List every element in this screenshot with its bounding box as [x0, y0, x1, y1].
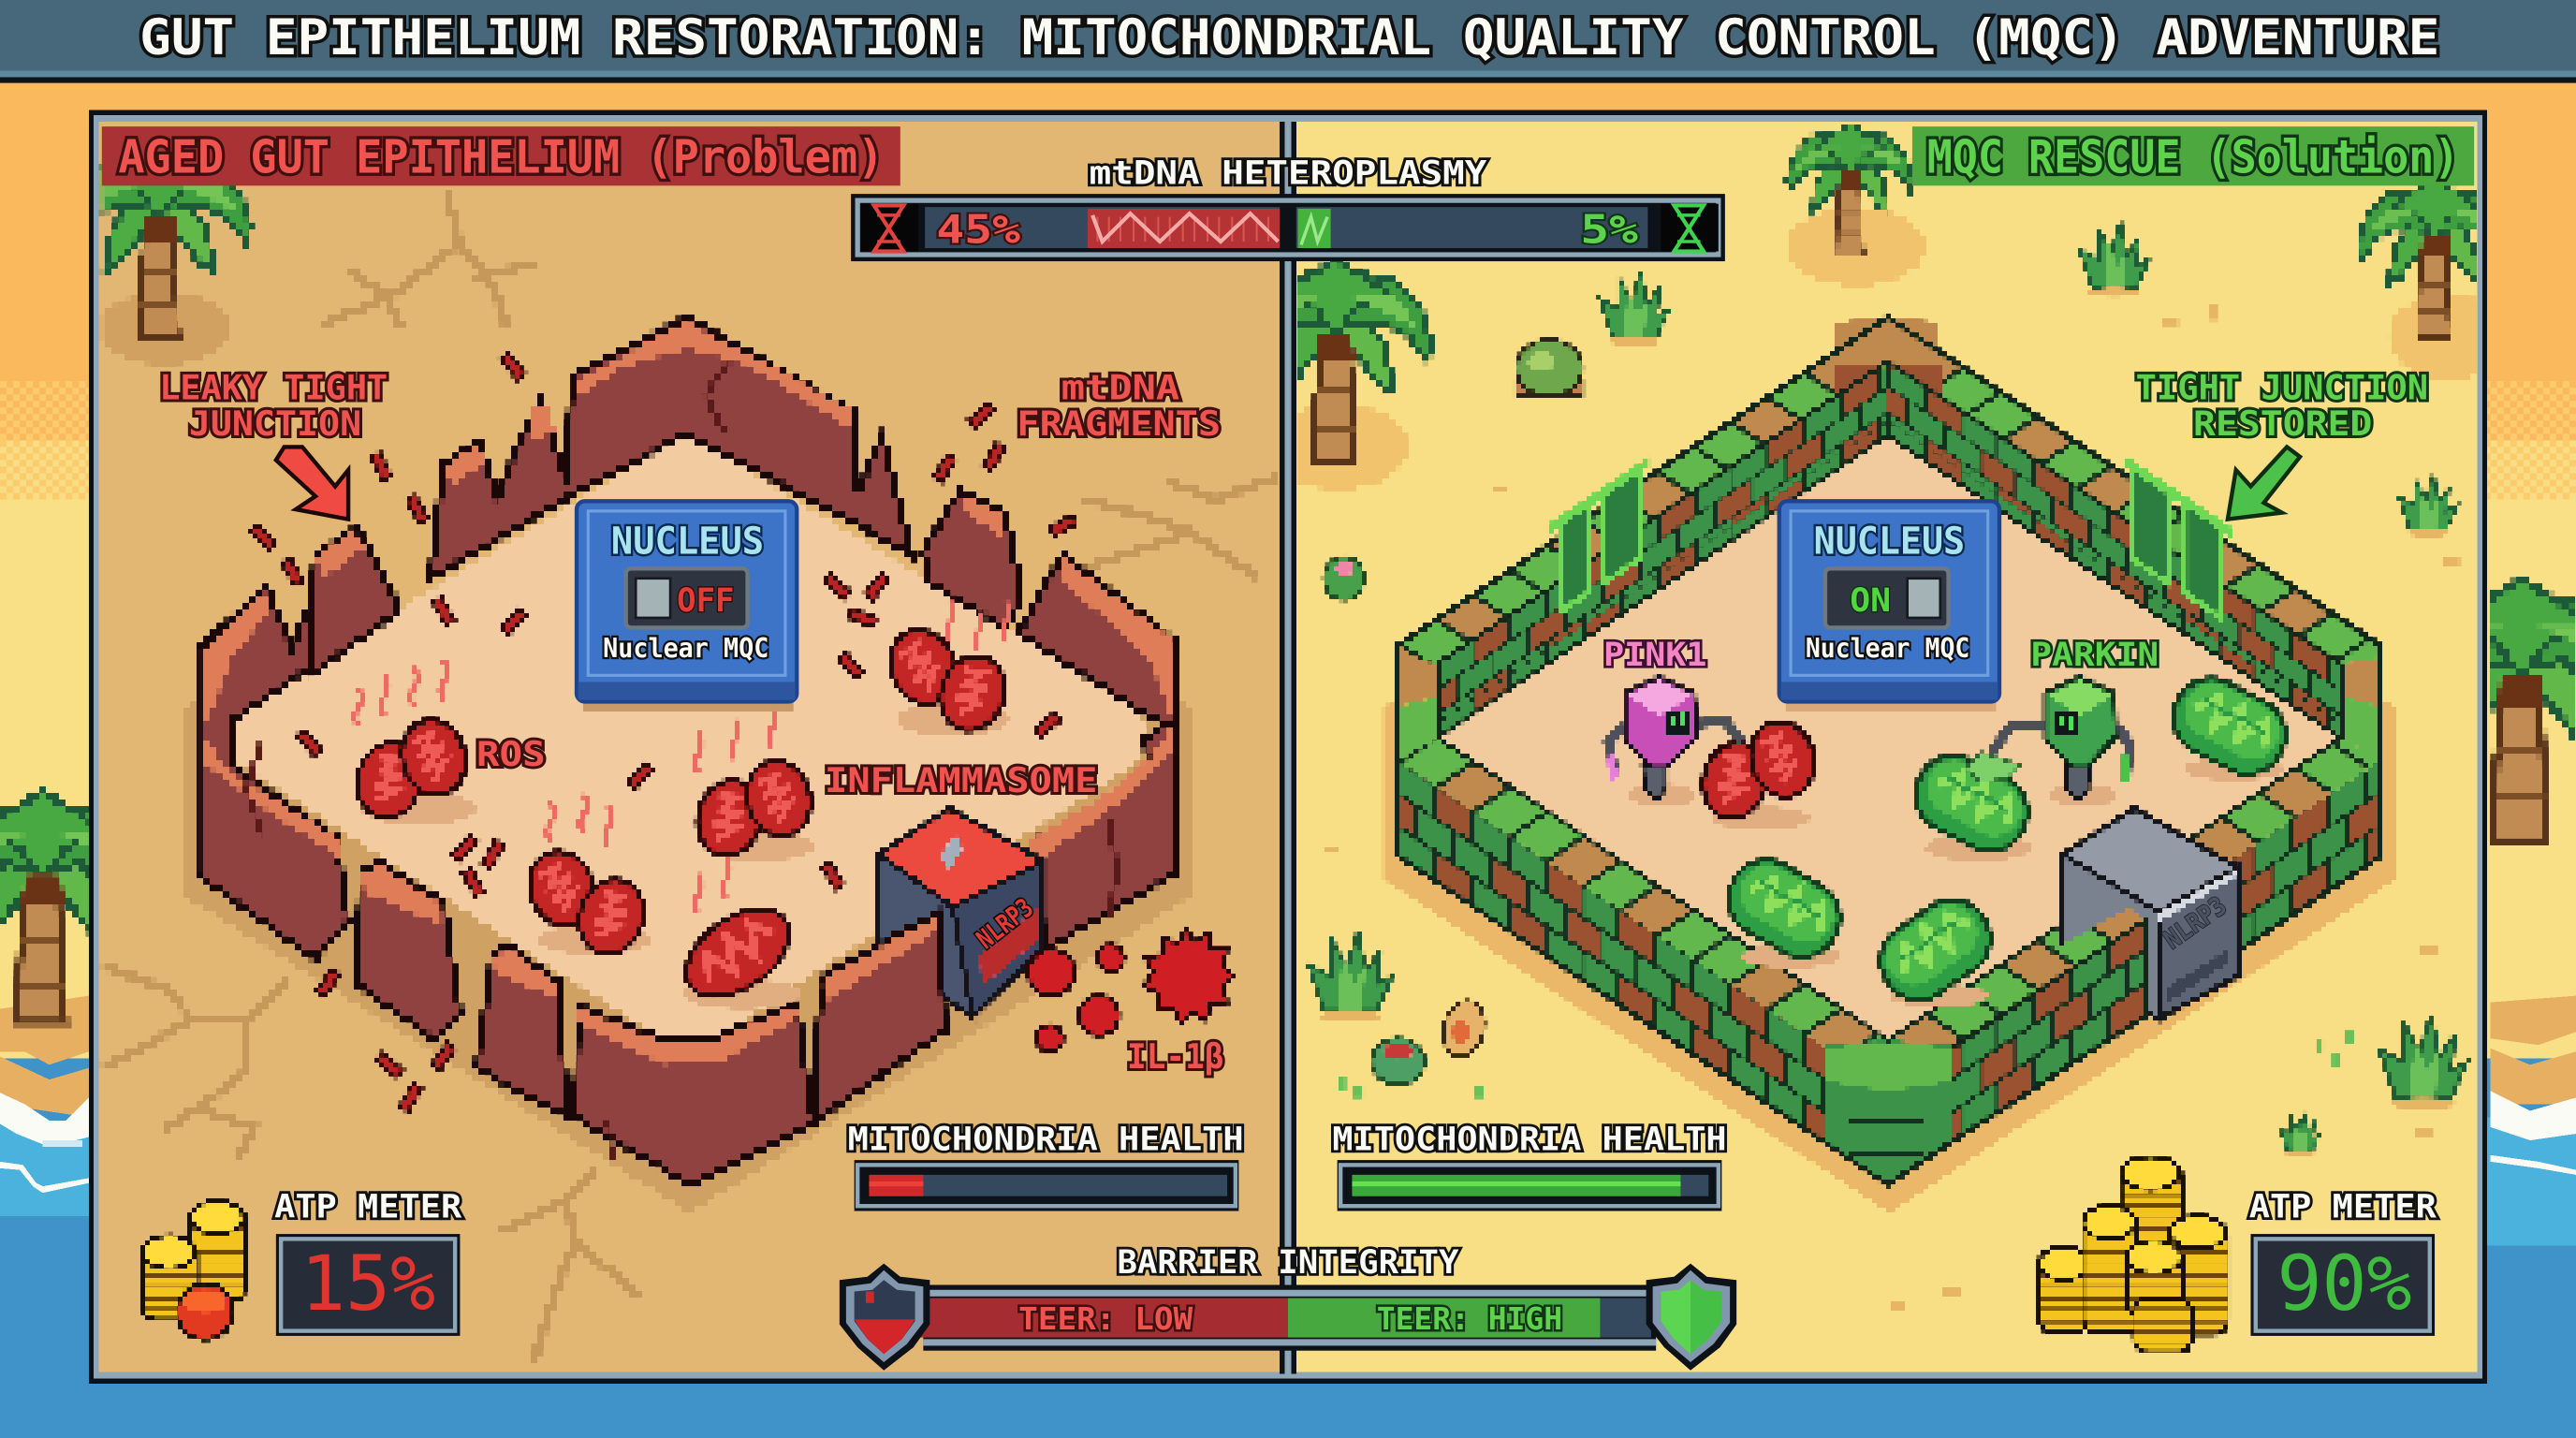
left front wall piece: [813, 912, 944, 1123]
strip palms outside the frame: [0, 579, 2576, 1022]
right coins: [2039, 1157, 2228, 1352]
NLRP3 box active: [879, 809, 1043, 1017]
label: NLRP3 active: NLRP3: [971, 892, 1039, 955]
label: leaky tight junction: LEAKY TIGHT: [159, 367, 388, 407]
nucleus right: [1779, 501, 1999, 712]
nucleus left: OFF: [677, 581, 735, 620]
right front wall piece overlapping box: [1952, 909, 2145, 1142]
nucleus right: NUCLEUS: [1814, 519, 1965, 563]
arrow: leaky junction: [276, 447, 348, 520]
label: ROS: ROS: [476, 734, 546, 774]
title banner: [0, 0, 2576, 83]
left mitochondria, fragments, cytokines: [250, 353, 1234, 1111]
label: tight junction restored: [2136, 367, 2428, 444]
label: tight junction restored: TIGHT JUNCTION: [2136, 367, 2428, 407]
NLRP3 box inactive: [2063, 809, 2237, 1019]
label: leaky tight junction: JUNCTION: [189, 404, 361, 444]
left coins: [143, 1201, 245, 1339]
right panel palms: [1240, 124, 2510, 490]
nucleus right: Nuclear MQC: [1806, 633, 1969, 664]
label: PINK1: PINK1: [1603, 636, 1707, 674]
ATP meter right: ATP METER: [2249, 1188, 2437, 1226]
right mitochondria and robots: [1608, 666, 2298, 1014]
ATP meter right: 90%: [2277, 1240, 2411, 1328]
mtDNA heteroplasmy gauge: [851, 154, 1725, 261]
mitochondria health right: MITOCHONDRIA HEALTH: [1332, 1121, 1727, 1159]
mitochondria health left: MITOCHONDRIA HEALTH: [848, 1121, 1244, 1159]
nucleus right: ON: [1850, 581, 1891, 620]
barrier integrity gauge: TEER: HIGH: [1377, 1300, 1562, 1337]
arrow: restored junction: [2228, 447, 2300, 520]
title banner: GUT EPITHELIUM RESTORATION: MITOCHONDRIAL QUALITY CONTROL (MQC) ADVENTURE: [139, 9, 2439, 66]
label: NLRP3 inactive: NLRP3: [2158, 890, 2232, 955]
ATP meter right: [2249, 1188, 2437, 1336]
left panel heading: AGED GUT EPITHELIUM (Problem): [118, 129, 884, 183]
shield left: [840, 1264, 929, 1371]
ATP meter left: 15%: [300, 1240, 435, 1328]
mitochondria health left: [848, 1121, 1244, 1211]
mtDNA heteroplasmy gauge: mtDNA HETEROPLASMY: [1090, 154, 1486, 193]
nucleus left: NUCLEUS: [611, 519, 764, 563]
label: inflammasome: INFLAMMASOME: [825, 760, 1097, 800]
label: IL-1 beta: IL-1β: [1127, 1036, 1224, 1077]
barrier integrity gauge: TEER: LOW: [1018, 1300, 1193, 1337]
right panel heading: MQC RESCUE (Solution): [1927, 129, 2459, 183]
label: mtDNA fragments: mtDNA: [1061, 367, 1179, 407]
label: tight junction restored: RESTORED: [2193, 404, 2372, 444]
left ground: cracks, palm, floor and back walls: [69, 146, 1280, 1360]
ATP meter left: ATP METER: [274, 1188, 462, 1226]
mitochondria health right: [1332, 1121, 1727, 1211]
ATP meter left: [274, 1188, 462, 1336]
label: mtDNA fragments: FRAGMENTS: [1017, 404, 1221, 444]
barrier integrity gauge: BARRIER INTEGRITY: [1117, 1243, 1459, 1282]
label: PARKIN: PARKIN: [2030, 636, 2159, 674]
plants and critters on right panel: [1309, 222, 2466, 1310]
shield right: [1647, 1264, 1736, 1371]
nucleus left: [577, 501, 797, 712]
mtDNA heteroplasmy gauge: 45%: [936, 207, 1021, 253]
nucleus left: Nuclear MQC: [603, 633, 768, 664]
right wall and floor: [1383, 317, 2395, 1212]
mtDNA heteroplasmy gauge: 5%: [1580, 207, 1639, 253]
label: leaky tight junction: [159, 367, 388, 444]
label: mtDNA fragments: [1017, 367, 1221, 444]
barrier integrity gauge: [920, 1243, 1656, 1351]
